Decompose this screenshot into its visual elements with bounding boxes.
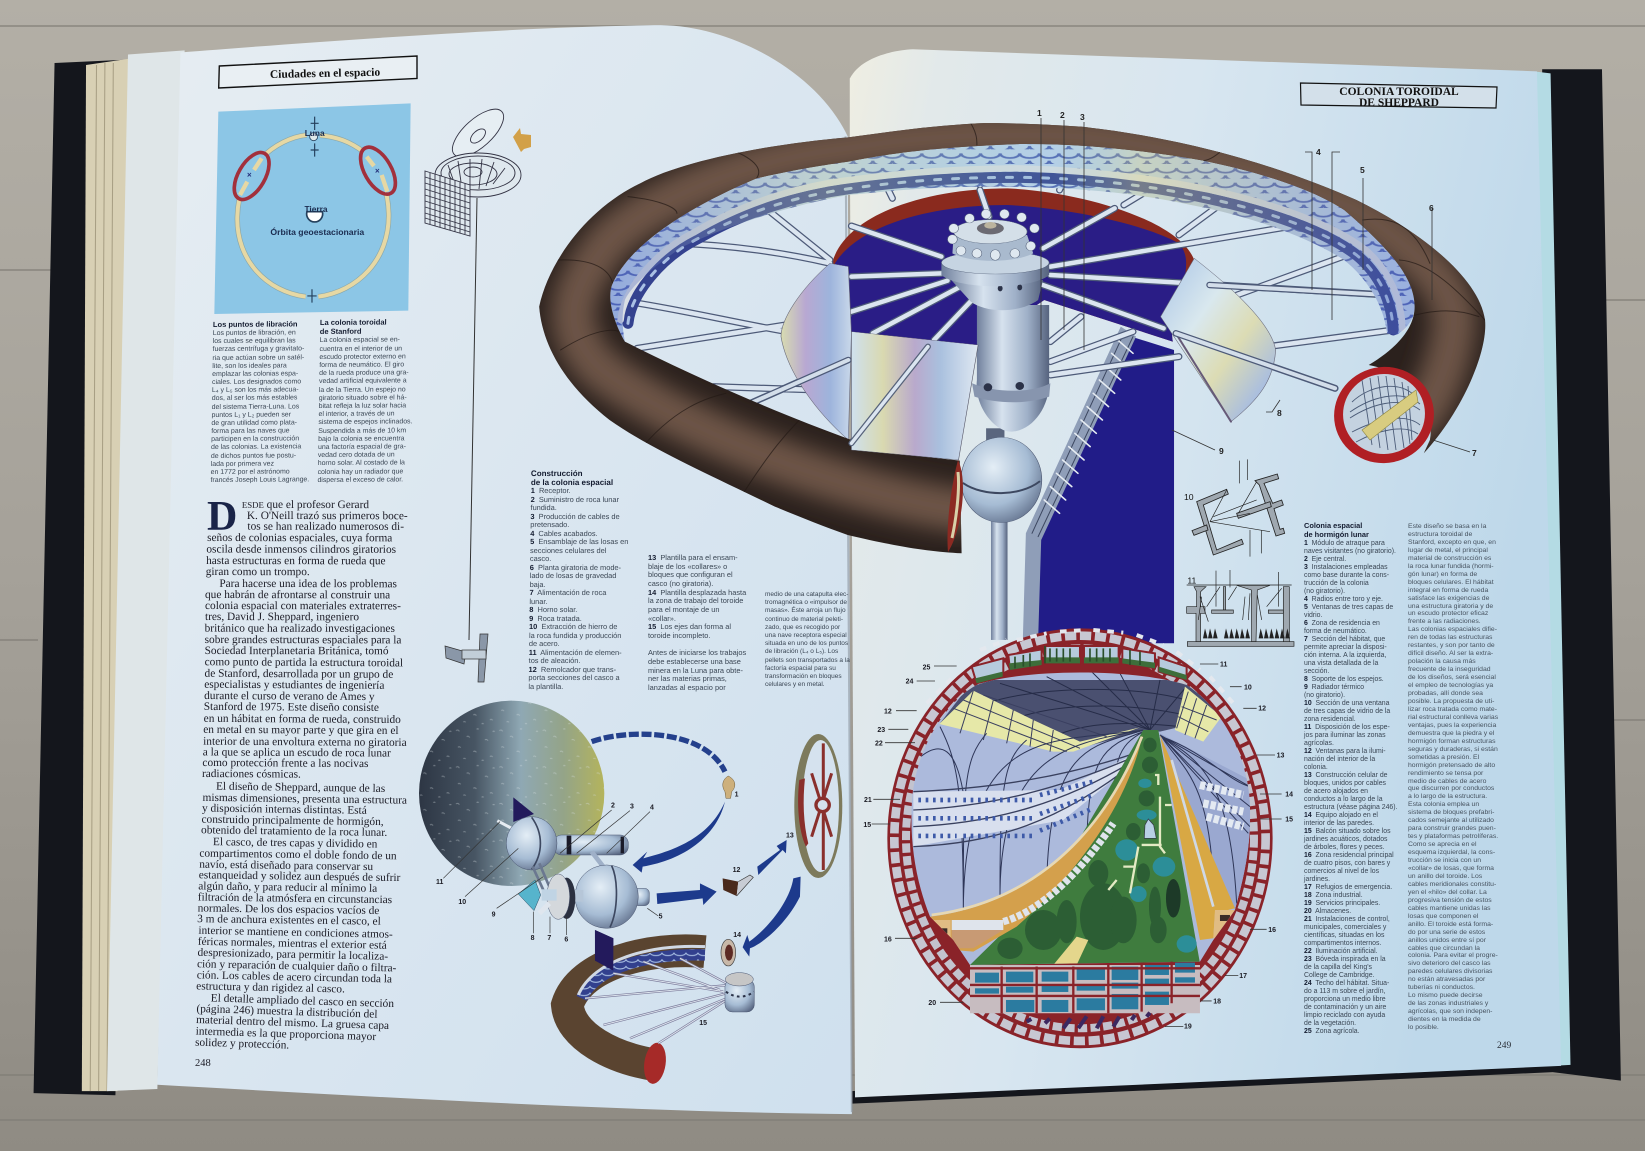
main serif text column, page 248: 3 m de anchura existentes en el casco, el — [197, 913, 381, 928]
header box: Colonia toroidal de Sheppard — [1300, 83, 1497, 109]
window band of the torus — [610, 144, 1415, 342]
main serif text column, page 248: El casco, de tres capas y dividido en — [213, 836, 378, 850]
callouts: numbers 2 to 11: 10 — [458, 899, 466, 906]
map: libration points around the Earth — [214, 103, 411, 314]
main serif text column, page 248: intermedia es la que proporciona mayor — [196, 1025, 377, 1043]
section: callouts: 13 — [1277, 752, 1285, 759]
main serif text column, page 248: El diseño de Sheppard, aunque de las — [216, 781, 385, 795]
callouts: numbers 2 to 11: 8 — [531, 935, 535, 942]
section: callouts: 25 — [923, 664, 931, 671]
section: inner chamber — [907, 663, 1257, 970]
icon: receptor 1: 1 — [735, 792, 739, 799]
callouts: numbers 2 to 11: 4 — [650, 804, 654, 811]
window section diagram 10 — [1184, 459, 1285, 557]
section: callouts: 17 — [1239, 973, 1247, 980]
text block: catapult paragraph: medio de una catapulta elec- tromagnética o «impulsor de masas». Éste arroja un flujo continuo de material peleti- zado, que es recogido por una nave receptora especial situada en uno de los puntos de libración (L₄ o L₅). Los pellets son transportados a la factoría espacial para su transformación en bloques celulares y en metal. — [765, 591, 850, 688]
construction sequence diagram: 13 — [786, 832, 794, 839]
main serif text column, page 248: normales. De los dos espacios vacíos de — [198, 902, 379, 917]
section: callouts: 21 — [864, 797, 872, 804]
callouts: numbers 2 to 11: 2 — [611, 802, 615, 809]
arrow: tug to template — [757, 840, 787, 875]
callouts: numbers 2 to 11: 5 — [659, 914, 663, 921]
section: garden paths — [1108, 775, 1172, 893]
text block: La colonia toroidal de Stanford: La colonia toroidal de Stanford La colonia espacial se en- cuentra en el interior de un escudo protector externo en forma de neumático. El giro de la rueda produce una gra- vedad artificial equivalente a la de la Tierra. Un espejo no giratorio situado sobre el há- bitat refleja la luz solar hacia el interior, a través de un sistema de espejos inclinados. Suspendida a más de 10 km bajo la colonia se encuentra una factoría espacial de gra- vedad cero dotada de un horno solar. Al costado de la colonia hay un radiador que dispersa el exceso de calor. — [317, 318, 413, 484]
main serif text column, page 248: colonia espacial con materiales extraterres- — [205, 600, 401, 612]
main serif text column, page 248: navío, está diseñado para conservar su — [199, 859, 374, 873]
section: callouts: 22 — [875, 740, 883, 747]
section: callouts: 14 — [1285, 792, 1293, 799]
icon: collar template 13 — [794, 734, 842, 878]
main serif text column, page 248: en metal en su mayor parte y que gira en el — [203, 724, 399, 737]
arrow: dashed trajectory — [592, 734, 725, 772]
section: callouts: 15 — [863, 822, 871, 829]
section: right skylight — [1175, 687, 1222, 742]
main serif text column, page 248: seños de colonias espaciales, cuya forma — [207, 532, 392, 544]
large section of the habitat — [863, 628, 1293, 1048]
icon: factory modules — [497, 797, 649, 971]
dark mirror disc with red rim — [833, 188, 1195, 345]
map: libration points around the Earth: Órbita geoestacionaria — [270, 226, 364, 237]
main serif text column, page 248: (página 246) muestra la distribución del — [196, 1003, 378, 1021]
main serif text column, page 248: obtenido del tratamiento de la roca lunar. — [201, 824, 388, 839]
callout numbers for main torus: 5 — [1360, 165, 1365, 175]
callout numbers for main torus: 8 — [1277, 408, 1282, 418]
callouts: numbers 2 to 11: 3 — [630, 803, 634, 810]
section: left promenade — [930, 735, 1143, 952]
icon: receptor 1 — [723, 776, 739, 799]
radiator panel and truss — [1023, 327, 1174, 643]
main serif text column, page 248: Para hacerse una idea de los problemas — [219, 578, 397, 590]
main serif text column, page 248: que habrán de afrontarse al construir una — [205, 589, 390, 601]
section: right wall — [1160, 733, 1250, 910]
section: callouts: 18 — [1213, 999, 1221, 1006]
arrow: factory to tug — [657, 883, 717, 905]
arrow: receptor to factory — [633, 802, 725, 873]
brown outer torus shield — [539, 123, 1486, 554]
text block: Colonia espacial de hormigón lunar: Colonia espacial de hormigón lunar 1 Módulo de atraque para naves visitantes (no giratorio). 2 Eje central. 3 Instalaciones empleadas como base durante la cons- trucción de la colonia (no giratorio). 4 Radios entre toro y eje. 5 Ventanas de tres capas de vidrio. 6 Zona de residencia en forma de neumático. 7 Sección del hábitat, que permite apreciar la disposi- ción interna. A la izquierda, una vista detallada de la sección. 8 Soporte de los espejos. 9 Radiador térmico (no giratorio). 10 Sección de una ventana de tres capas de vidrio de la zona residencial. 11 Disposición de los espe- jos para iluminar las zonas agrícolas. 12 Ventanas para la ilumi- nación del interior de la colonia. 13 Construcción celular de bloques, unidos por cables de acero alojados en conductos a lo largo de la estructura (véase página 246). 14 Equipo alojado en el interior de las paredes. 15 Balcón situado sobre los jardines acuáticos, dotados de árboles, flores y peces. 16 Zona residencial principal de cuatro pisos, con bares y comercios al nivel de los jardines. 17 Refugios de emergencia. 18 Zona industrial. 19 Servicios principales. 20 Almacenes. 21 Instalaciones de control, municipales, comerciales y científicas, situadas en los compartimentos internos. 22 Iluminación artificial. 23 Bóveda inspirada en la de la capilla del King's College de Cambridge. 24 Techo del hábitat. Situa- do a 113 m sobre el jardín, proporciona un medio libre de contaminación y un aire limpio reciclado con ayuda de la vegetación. 25 Zona agrícola. — [1304, 521, 1397, 1035]
section: left wall ribs — [913, 727, 1143, 912]
torus cross-section detail (right) — [1325, 358, 1443, 472]
section: balcony rows left — [913, 758, 1127, 846]
callout numbers for main torus: 9 — [1219, 446, 1224, 456]
section: trees — [997, 738, 1167, 959]
mirror panels — [750, 258, 1387, 440]
callouts: numbers 2 to 11: 11 — [436, 879, 443, 886]
satellite and mirror sketch with arrow — [425, 101, 531, 236]
icon: incomplete torus 15: 15 — [699, 1020, 707, 1027]
section: callouts: 23 — [877, 727, 885, 734]
front mirror panel overlapping the tube — [851, 332, 978, 460]
header box: Ciudades en el espacio: Ciudades en el espacio — [270, 67, 381, 81]
section: callouts: 16 — [1268, 927, 1276, 934]
main serif text column, page 248: mismas dimensiones, presenta una estructura — [202, 792, 407, 807]
map: libration points around the Earth: × — [375, 166, 380, 175]
main serif text column, page 248: interior se mantiene en condiciones atmos- — [198, 925, 393, 941]
icon: Moon — [419, 701, 604, 886]
callouts: numbers 2 to 11: 9 — [492, 911, 496, 918]
drop cap D: D — [207, 494, 237, 540]
main serif text column, page 248: despresionizado, para permitir la localiza- — [197, 947, 388, 963]
main serif text column, page 248: Sociedad Interplanetaria Británica, tomó — [205, 645, 389, 657]
section: callouts — [863, 662, 1293, 1031]
page number 249: 249 — [1497, 1041, 1512, 1051]
central hub and axis — [941, 209, 1050, 640]
section: callouts: 19 — [1184, 1024, 1192, 1031]
text block: Construcción de la colonia espacial: Construcción de la colonia espacial 1 Receptor. 2 Suministro de roca lunar fundida. 3 Producción de cables de pretensado. 4 Cables acabados. 5 Ensamblaje de las losas en secciones celulares del casco. 6 Planta giratoria de mode- lado de losas de gravedad baja. 7 Alimentación de roca lunar. 8 Horno solar. 9 Roca tratada. 10 Extracción de hierro de la roca fundida y producción de acero. 11 Alimentación de elemen- tos de aleación. 12 Remolcador que trans- porta secciones del casco a la plantilla. — [528, 469, 628, 690]
main serif text column, page 248: giran como un trompo. — [206, 566, 310, 578]
callout numbers for main torus: 1 — [1037, 108, 1042, 118]
section: lower rooms — [970, 962, 1200, 1028]
main serif text column, page 248: interior de una envoltura externa no giratoria — [203, 736, 407, 749]
main serif text column, page 248: ción y reparación de cualquier daño o filtra- — [197, 958, 397, 974]
section: callouts: 12 — [1258, 706, 1266, 713]
callout numbers for main torus: 2 — [1060, 110, 1065, 120]
main serif text column, page 248: radiaciones cósmicas. — [202, 768, 301, 781]
main serif text column, page 248: tos se han realizado numerosos di- — [247, 521, 404, 533]
section: left skylight — [939, 691, 1140, 752]
main serif text column, page 248: oscila desde inmensos cilindros giratorios — [206, 544, 396, 556]
main serif text column, page 248: durante el curso de verano de Ames y — [204, 690, 375, 703]
main serif text column, page 248: de Stanford, desarrollada por un grupo de — [205, 668, 393, 681]
map: libration points around the Earth: Tierra — [304, 204, 328, 214]
torus cut end with red section (left) — [947, 460, 963, 552]
section: right promenade — [1160, 735, 1235, 940]
main serif text column, page 248: ción. Los cables de acero circundan toda la — [197, 969, 392, 985]
main serif text column, page 248: especialistas y estudiantes de ingeniería — [204, 679, 384, 692]
main serif text column, page 248: sobre grandes estructuras espaciales para la — [205, 634, 401, 646]
callout numbers for main torus: 6 — [1429, 203, 1434, 213]
header box: Ciudades en el espacio — [219, 56, 417, 88]
section: callouts: 15 — [1285, 817, 1293, 824]
map: libration points around the Earth: Luna — [305, 128, 325, 138]
header box: Colonia toroidal de Sheppard: DE SHEPPARD — [1359, 97, 1439, 109]
main serif text column, page 248: féricas normales, mientras el exterior está — [198, 936, 387, 952]
section: garden floor — [970, 730, 1200, 965]
section: hull ring — [887, 628, 1273, 1048]
icon: collar 14: 14 — [733, 932, 741, 939]
main serif text column, page 248: compartimentos como el doble fondo de un — [199, 848, 397, 862]
page number 248: 248 — [195, 1058, 211, 1069]
section: callouts: 12 — [884, 708, 892, 715]
section: callouts: 24 — [906, 679, 914, 686]
section: callouts: 11 — [1220, 662, 1227, 669]
main serif text column, page 248: como protección frente a las nocivas — [202, 757, 368, 770]
main serif text column, page 248: ESDE que el profesor Gerard — [242, 499, 369, 511]
callouts: numbers 2 to 11: 6 — [564, 937, 568, 944]
main serif text column, page 248: algún daño, y para reducir al mínimo la — [198, 880, 377, 895]
section: agricultural windows — [927, 630, 1233, 703]
window section diagram 10: 10 — [1184, 492, 1194, 502]
main serif text column, page 248: como punto de partida la estructura toroidal — [205, 656, 403, 669]
main serif text column, page 248: en un hábitat en forma de rueda, construido — [204, 713, 401, 726]
main serif text column, page 248: El detalle ampliado del casco en sección — [211, 992, 394, 1010]
arrow: template to torus — [743, 877, 801, 957]
callouts: numbers 2 to 11 — [436, 802, 663, 944]
section: ceiling vault — [940, 680, 1223, 750]
callouts: numbers 2 to 11: 7 — [547, 935, 551, 942]
main serif text column, page 248 — [195, 494, 408, 1055]
main serif text column, page 248: hasta estructuras en forma de rueda que — [206, 555, 386, 567]
icon: tug 12 — [723, 867, 753, 896]
callout numbers for main torus: 4 — [1316, 147, 1321, 157]
thin tether and small satellite — [445, 198, 488, 682]
main serif text column, page 248: construido principalmente de hormigón, — [201, 814, 384, 828]
text block: Los puntos de libración: Los puntos de libración Los puntos de libración, en los cuales se equilibran las fuerzas centrífuga y gravitato- ria que actúan sobre un satél- lite, son los ideales para emplazar las colonias espa- ciales. Los designados como L₄ y L₅ son los más adecua- dos, al ser los más estables del sistema Tierra-Luna. Los puntos L₁ y L₂ pueden ser de gran utilidad como plata- forma para las naves que participen en la construcción de las colonias. La existencia de dichos puntos fue postu- lada por primera vez en 1772 por el astrónomo francés Joseph Louis Lagrange. — [210, 319, 309, 484]
callout numbers for main torus: 7 — [1472, 448, 1477, 458]
map: libration points around the Earth: × — [247, 170, 252, 179]
icon: incomplete torus 15 — [567, 930, 754, 1085]
main serif text column, page 248: tres, David J. Sheppard, ingeniero — [205, 611, 359, 623]
callout numbers for main torus: 3 — [1080, 112, 1085, 122]
construction sequence diagram — [419, 701, 842, 1085]
main serif text column, page 248: y disposición internas distintas. Está — [202, 803, 367, 817]
main serif text column, page 248: a la que se aplica un escudo de roca lunar — [203, 746, 391, 760]
header box: Colonia toroidal de Sheppard: COLONIA TOROIDAL — [1339, 86, 1459, 98]
main serif text column, page 248: K. O'Neill trazó sus primeros boce- — [247, 510, 408, 522]
mirror and agriculture diagram 11 — [1187, 570, 1294, 646]
mirror and agriculture diagram 11: 11 — [1187, 575, 1197, 585]
main serif text column, page 248: filtración de la atmósfera en circunstancias — [198, 891, 392, 906]
section: callouts: 10 — [1244, 684, 1252, 691]
main serif text column, page 248: estanqueidad y solidez aun después de sufrir — [199, 869, 401, 884]
spokes of the wheel — [628, 170, 1393, 443]
callout numbers for main torus — [1037, 108, 1477, 458]
text block: Este diseño se basa: Este diseño se basa en la estructura toroidal de Stanford, excepto en que, en lugar de metal, el principal material de construcción es la roca lunar fundida (hormi- gón lunar) en forma de bloques celulares. El hábitat integral en forma de rueda satisface las exigencias de una estructura giratoria y de un escudo protector eficaz frente a las radiaciones. Las colonias espaciales difie- ren de todas las estructuras restantes, y son por tanto de difícil diseño. Al ser la extra- polación la causa más frecuente de la inseguridad de los diseños, será esencial el empleo de tecnologías ya probadas, allí donde sea posible. La propuesta de uti- lizar roca tratada como mate- rial estructural conlleva varias ventajas, pues la experiencia demuestra que la piedra y el hormigón forman estructuras seguras y duraderas, si están sometidas a presión. El hormigón pretensado de alto rendimiento se tensa por medio de cables de acero que discurren por conductos a lo largo de la estructura. Esta colonia emplea un sistema de bloques prefabri- cados semejante al utilizado para construir grandes puen- tes y plataformas petrolíferas. Como se aprecia en el esquema izquierdal, la cons- trucción se inicia con un «collar» de losas, que forma un anillo del toroide. Los cables meridionales constitu- yen el «hilo» del collar. La progresiva tensión de estos cables mantiene unidas las losas que componen el anillo. El toroide está forma- do por una serie de estos anillos unidos entre sí por cables que circundan la colonia. Para evitar el progre- sivo deterioro del casco las paredes celulares divisorias no están atravesadas por tuberías ni conductos. Lo mismo puede decirse de las zonas industriales y agrícolas, que son indepen- dientes en la medida de lo posible. — [1408, 523, 1498, 1031]
main serif text column, page 248: material dentro del mismo. La gruesa capa — [196, 1014, 389, 1032]
main serif text column, page 248: Stanford de 1975. Este diseño consiste — [204, 701, 379, 714]
main serif text column, page 248: solidez y protección. — [195, 1037, 290, 1052]
main serif text column, page 248: estructura y dan rigidez al casco. — [196, 980, 345, 996]
section: callouts: 16 — [884, 936, 892, 943]
section: callouts: 20 — [928, 1000, 936, 1007]
icon: collar 14 — [721, 932, 741, 966]
text block: items 13 to 15 and intro: 13 Plantilla para el ensam- blaje de los «collares» o bloques que configuran el casco (no giratoria). 14 Plantilla desplazada hasta la zona de trabajo del toroide para el montaje de un «collar». 15 Los ejes dan forma al toroide incompleto. Antes de iniciarse los trabajos debe establecerse una base minera en la Luna para obte- ner las materias primas, lanzadas al espacio por — [648, 553, 746, 692]
icon: tug 12: 12 — [733, 867, 741, 874]
main serif text column, page 248: británico que ha realizado investigaciones — [205, 623, 395, 635]
